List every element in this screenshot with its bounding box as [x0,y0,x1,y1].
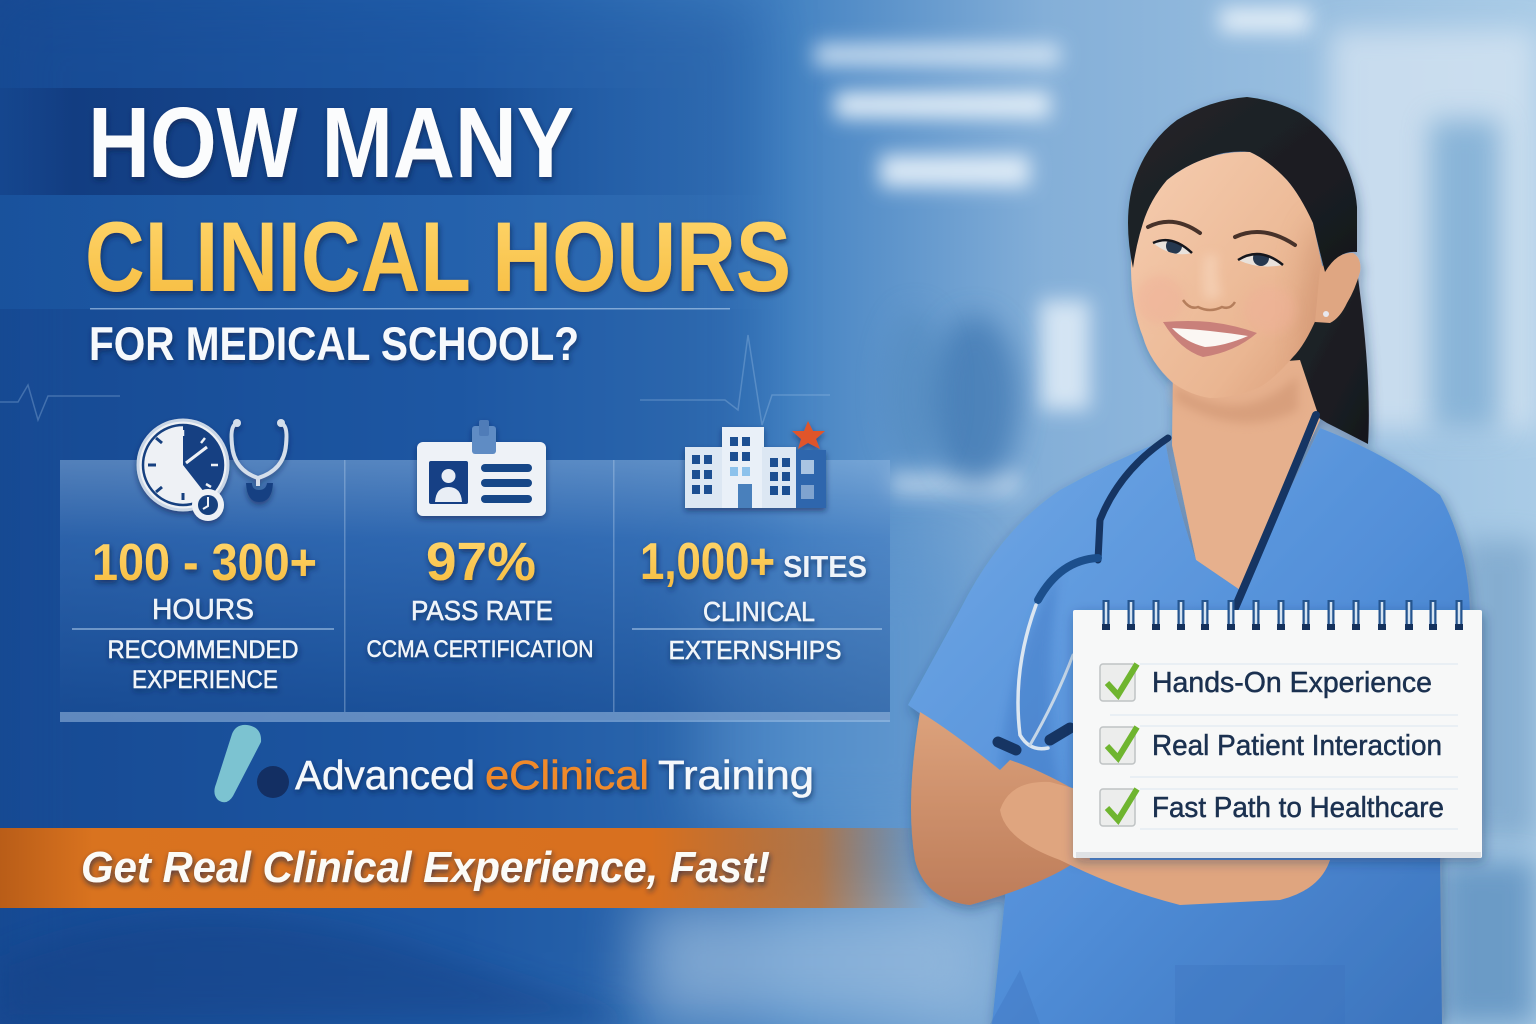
stat: sites: 1,000+ [640,533,775,591]
logo: Advanced eClinical Training: Advanced [295,752,475,798]
check row 2: Real Patient Interaction [1152,730,1442,762]
stat: sites: SITES [783,549,867,584]
stat: hours: EXPERIENCE [132,666,278,694]
stat: hours: RECOMMENDED [108,636,298,664]
eyes [1153,238,1283,267]
stat: sites: CLINICAL [703,596,815,627]
logo: Advanced eClinical Training [214,725,814,802]
hair: ponytail [1280,270,1369,444]
nurse figure [908,97,1470,1024]
banner: call to action [0,828,930,908]
scrub folds [1000,570,1060,790]
title [85,87,791,370]
neck [1172,360,1320,590]
nose [1183,300,1235,310]
title: FOR MEDICAL SCHOOL? [89,317,579,370]
check row 3: Fast Path to Healthcare [1152,792,1444,824]
eyebrows [1148,222,1295,245]
icon: hospital building [685,421,826,508]
logo: Advanced eClinical Training: Training [658,752,814,798]
scrub pockets [990,965,1345,1024]
check row 1: Hands-On Experience [1152,667,1432,699]
notebook checklist [1073,600,1482,858]
title band: top [0,88,730,195]
stats panel [60,419,890,722]
stat: pass rate: PASS RATE [411,595,553,626]
stat: sites [632,533,882,665]
crossed forearm [1000,782,1330,905]
hair: top [1128,97,1357,272]
face shading [1142,228,1322,344]
ruled lines [1110,664,1458,829]
ear [1315,253,1360,323]
icon: logo mark [214,725,289,802]
stat: hours: 100 - 300+ [92,534,317,592]
heartbeat line decoration [0,335,830,425]
stat: hours: HOURS [152,594,254,626]
stat: pass rate: CCMA CERTIFICATION [366,636,594,663]
icon: clock and stethoscope [138,419,286,521]
title: CLINICAL HOURS [85,201,791,312]
stat: pass rate [366,532,594,663]
scrub torso [908,428,1470,1024]
stethoscope [998,415,1316,750]
mouth [1163,321,1257,357]
left arm [911,712,1090,905]
banner: call to action: Get Real Clinical Experience, Fast! [81,843,770,892]
logo: Advanced eClinical Training: eClinical [485,752,649,798]
spiral binding [1102,600,1463,630]
icon: ID badge [417,420,546,516]
title band: middle [0,195,800,309]
stat: sites: EXTERNSHIPS [668,635,842,665]
stat: hours [72,534,334,694]
head [1131,152,1323,398]
stat: pass rate: 97% [426,532,536,592]
title: HOW MANY [88,87,574,199]
